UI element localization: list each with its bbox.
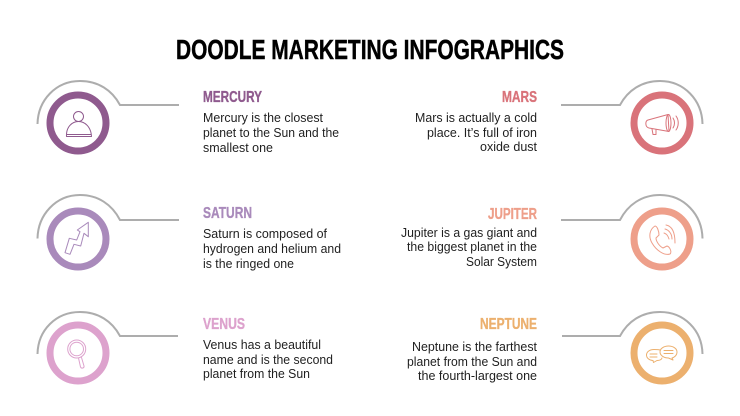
panel: jupiter bbox=[401, 195, 702, 269]
connector arc: saturn bbox=[38, 195, 179, 238]
panel: mars bbox=[415, 81, 702, 154]
icon ring: mars bbox=[634, 95, 690, 151]
text: mercury: planet to the Sun and the bbox=[203, 126, 339, 140]
connector arc: jupiter bbox=[561, 195, 702, 238]
icon: speech bubbles bbox=[646, 346, 677, 362]
connector arc: mars bbox=[561, 81, 702, 124]
text: mars bbox=[415, 111, 538, 154]
heading: venus: VENUS bbox=[203, 316, 245, 333]
text: saturn: is the ringed one bbox=[203, 257, 294, 271]
icon: rising arrow bbox=[65, 222, 88, 254]
text: saturn: Saturn is composed of bbox=[203, 227, 328, 241]
panel: saturn bbox=[38, 195, 341, 271]
text: venus bbox=[203, 338, 333, 381]
icon ring: jupiter bbox=[634, 211, 690, 267]
icon ring: neptune bbox=[634, 325, 690, 381]
text: mars: oxide dust bbox=[480, 140, 538, 154]
panel: neptune bbox=[407, 312, 702, 383]
text: mercury bbox=[203, 111, 339, 155]
text: jupiter bbox=[401, 226, 537, 269]
icon: person bbox=[66, 112, 92, 136]
title: DOODLE MARKETING INFOGRAPHICS bbox=[176, 34, 564, 65]
text: venus: planet from the Sun bbox=[203, 367, 310, 381]
heading: jupiter: JUPITER bbox=[488, 206, 537, 223]
text: saturn: hydrogen and helium and bbox=[203, 242, 341, 256]
icon: telephone bbox=[650, 225, 675, 254]
text: venus: name and is the second bbox=[203, 353, 333, 367]
text: mercury: Mercury is the closest bbox=[203, 111, 324, 125]
text: venus: Venus has a beautiful bbox=[203, 338, 321, 352]
text: neptune: planet from the Sun and bbox=[407, 355, 537, 369]
text: mars: Mars is actually a cold bbox=[415, 111, 537, 125]
panel: venus bbox=[38, 312, 333, 381]
text: mars: place. It’s full of iron bbox=[427, 126, 537, 140]
text: saturn bbox=[203, 227, 341, 271]
text: jupiter: the biggest planet in the bbox=[407, 240, 537, 254]
connector arc: neptune bbox=[562, 312, 702, 354]
icon: magnifying glass bbox=[68, 340, 86, 368]
icon ring: venus bbox=[50, 325, 106, 381]
text: neptune: the fourth-largest one bbox=[418, 369, 537, 383]
connector arc: venus bbox=[38, 312, 178, 354]
panel: mercury bbox=[38, 81, 339, 155]
text: neptune: Neptune is the farthest bbox=[412, 340, 538, 354]
text: jupiter: Jupiter is a gas giant and bbox=[401, 226, 537, 240]
heading: neptune: NEPTUNE bbox=[480, 316, 537, 333]
text: mercury: smallest one bbox=[203, 141, 273, 155]
icon: megaphone bbox=[646, 114, 678, 134]
heading: saturn: SATURN bbox=[203, 205, 252, 222]
connector arc: mercury bbox=[38, 81, 179, 124]
icon ring: saturn bbox=[50, 211, 106, 267]
text: jupiter: Solar System bbox=[466, 255, 537, 269]
icon ring: mercury bbox=[50, 95, 106, 151]
heading: mars: MARS bbox=[502, 89, 537, 106]
heading: mercury: MERCURY bbox=[203, 89, 262, 106]
text: neptune bbox=[407, 340, 538, 383]
